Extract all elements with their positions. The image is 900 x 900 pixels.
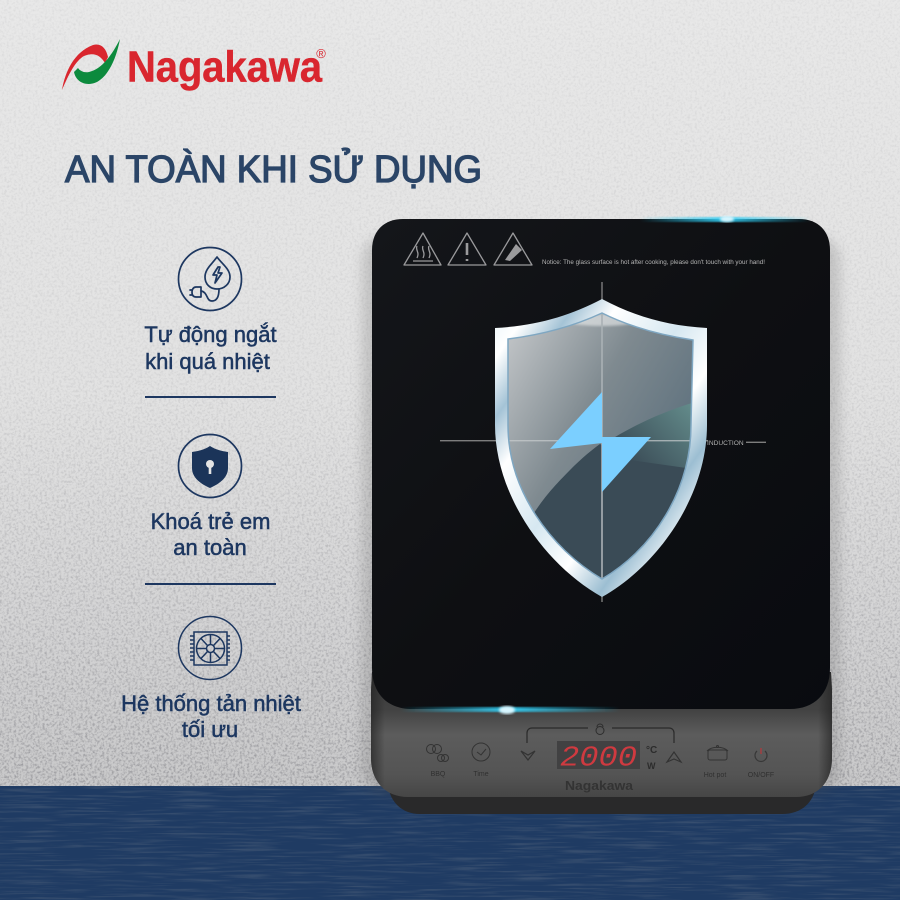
icon: shield with keyhole <box>178 434 242 498</box>
label: auto cut-off <box>144 322 277 374</box>
label: auto cut-off: Tự động ngắt <box>144 322 277 347</box>
logo wordmark: Nagakawa <box>127 42 322 92</box>
label: child lock: Khoá trẻ em <box>151 509 270 534</box>
LED display: 2000 <box>560 742 637 774</box>
notice text: Notice: The glass surface is hot after cooking, please don't touch with your hand! <box>542 259 765 266</box>
glow: bottom edge <box>400 706 620 714</box>
navy floor <box>0 786 900 900</box>
cooktop body <box>371 672 832 797</box>
unit labels: °C <box>646 745 657 756</box>
lock bracket <box>527 728 674 743</box>
brand on panel: Nagakawa <box>565 778 634 793</box>
label: child lock <box>151 509 270 560</box>
shield metal ring <box>495 299 707 597</box>
shield inner edge <box>508 313 693 579</box>
glow: top edge <box>640 216 810 222</box>
warning icons <box>404 233 532 265</box>
arrow down <box>521 751 535 760</box>
logo: Nagakawa <box>62 39 326 92</box>
label: cooling system: Hệ thống tản nhiệt <box>121 691 301 716</box>
cooktop base <box>388 785 816 814</box>
feature: auto cut-off <box>144 248 277 374</box>
label: on/off: ON/OFF <box>748 772 774 779</box>
label: hot pot: Hot pot <box>704 772 726 779</box>
label: time: Time <box>473 771 489 778</box>
wall shadow <box>362 235 840 795</box>
shield glass <box>508 314 692 578</box>
label: cooling system <box>121 691 301 742</box>
label: cooling system: tối ưu <box>182 717 238 742</box>
title: AN TOÀN KHI SỬ DỤNG <box>65 147 482 191</box>
protective shield <box>495 299 707 597</box>
control panel: W <box>647 761 656 771</box>
feature: cooling system <box>121 616 301 742</box>
glass crosshair <box>440 282 766 602</box>
icon: time <box>472 743 490 761</box>
logo swoosh <box>62 39 120 90</box>
icon: hot pot <box>707 746 728 760</box>
induction label: INDUCTION <box>707 440 744 447</box>
glass top <box>372 219 830 709</box>
label: child lock: an toàn <box>173 535 247 560</box>
label: BBQ: BBQ <box>431 771 446 778</box>
arrow up <box>667 752 681 762</box>
label: auto cut-off: khi quá nhiệt <box>145 349 270 374</box>
induction cooktop <box>362 216 840 814</box>
registered mark: ® <box>316 46 326 61</box>
side glow <box>694 353 704 437</box>
lock icon <box>596 724 604 734</box>
feature: child lock <box>151 434 270 560</box>
control panel <box>426 724 774 793</box>
icon: BBQ <box>426 744 448 762</box>
icon: water drop with bolt and plug <box>178 248 242 310</box>
icon: power <box>755 748 767 761</box>
icon: cooling fan <box>178 616 242 680</box>
lightning bolt <box>550 392 651 492</box>
